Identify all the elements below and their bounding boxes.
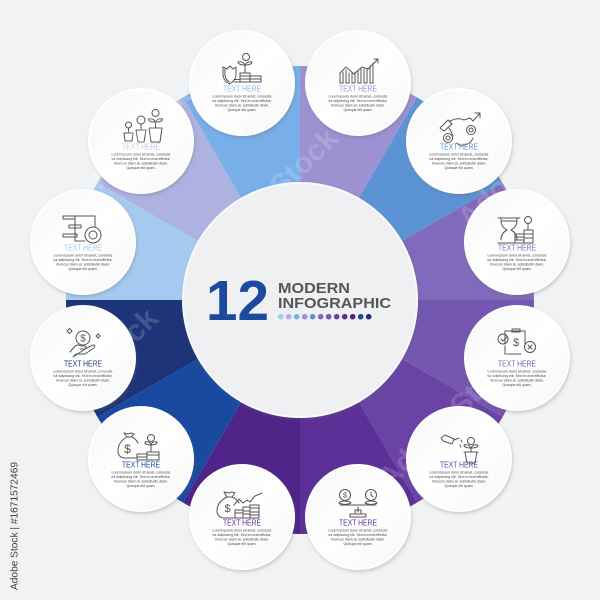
icon: scale with coin and clock	[339, 490, 377, 517]
label: TEXT HERE	[122, 460, 160, 470]
title number 12: 12	[206, 269, 269, 333]
description: tur adipiscing elit. Sed eu erat efficitur,	[328, 532, 388, 537]
panel: step 8 money bag growth	[190, 465, 294, 569]
description: tur adipiscing elit. Sed eu erat efficitur,	[488, 257, 546, 262]
description: Lorem ipsum dolor sit amet, consecte	[54, 252, 113, 258]
dollar sign: $	[124, 442, 131, 456]
label: TEXT HERE	[223, 84, 261, 94]
description: Quisque elit quam.	[228, 541, 256, 546]
description: tur adipiscing elit. Sed eu erat efficitur,	[488, 373, 546, 378]
label: TEXT HERE	[339, 84, 377, 94]
description: rhoncus diam at, sollicitudin diam.	[56, 262, 110, 266]
panel: step 4 hourglass	[465, 190, 569, 294]
panel: step 10 hand with coin	[31, 306, 135, 410]
description: Quisque elit quam.	[444, 483, 474, 488]
icon: watering can and money plant	[441, 435, 478, 463]
description: Lorem ipsum dolor sit amet, consecte	[212, 94, 272, 98]
label: TEXT HERE	[223, 518, 261, 528]
description: tur adipiscing elit. Sed eu erat efficitur,	[54, 257, 112, 262]
icon: hand holding coin with sparkles	[67, 328, 100, 357]
description: tur adipiscing elit. Sed eu erat efficitur,	[212, 98, 272, 103]
description: Quisque elit quam.	[344, 107, 372, 112]
description: Quisque elit quam.	[444, 165, 474, 170]
panel: step 1 shield and coins	[190, 31, 294, 135]
description: rhoncus diam at, sollicitudin diam.	[114, 478, 168, 484]
description: rhoncus diam at, sollicitudin diam.	[432, 160, 486, 166]
description: rhoncus diam at, sollicitudin diam.	[215, 102, 269, 108]
description: Lorem ipsum dolor sit amet, consecte	[112, 470, 171, 474]
description: Quisque elit quam.	[68, 382, 98, 387]
description: Lorem ipsum dolor sit amet, consecte	[328, 528, 388, 532]
icon: rising bar chart	[340, 59, 378, 83]
panel: step 12 growing plants	[89, 89, 193, 193]
icon: clipboard check and cross	[498, 329, 536, 354]
title: modern infographic: MODERN	[278, 280, 350, 297]
description: rhoncus diam at, sollicitudin diam.	[490, 262, 544, 266]
description: rhoncus diam at, sollicitudin diam.	[490, 378, 544, 382]
description: tur adipiscing elit. Sed eu erat efficitur,	[112, 474, 170, 479]
label: TEXT HERE	[498, 244, 536, 252]
color dots legend	[278, 314, 372, 320]
center circle	[183, 183, 417, 417]
description: tur adipiscing elit. Sed eu erat efficitur,	[430, 474, 488, 479]
description: Quisque elit quam.	[502, 382, 532, 387]
description: rhoncus diam at, sollicitudin diam.	[331, 536, 385, 542]
icon: three potted plants	[124, 110, 162, 142]
icon: hourglass and coins	[498, 216, 533, 243]
panel: step 3 coin exchange	[407, 89, 511, 193]
description: Lorem ipsum dolor sit amet, consecte	[488, 252, 547, 258]
dollar sign: $	[80, 334, 86, 344]
description: Lorem ipsum dolor sit amet, consecte	[112, 152, 171, 156]
title: modern infographic: INFOGRAPHIC	[278, 295, 391, 312]
label: TEXT HERE	[498, 360, 536, 368]
stock image id vertical text: Adobe Stock | #1671572469	[8, 462, 20, 590]
panel: step 6 watering plant	[407, 407, 511, 511]
description: Quisque elit quam.	[344, 541, 372, 546]
description: rhoncus diam at, sollicitudin diam.	[331, 102, 385, 108]
description: tur adipiscing elit. Sed eu erat efficitur,	[112, 156, 170, 161]
panel: step 7 balance scale	[306, 465, 410, 569]
watermarks: Adobe Stock	[82, 42, 235, 195]
icon: money bag, coins, rising arrow	[217, 492, 262, 518]
dollar sign: $	[343, 490, 348, 500]
icon: money bag and coin stacks	[118, 433, 159, 460]
description: rhoncus diam at, sollicitudin diam.	[56, 378, 110, 382]
panel: step 9 money bag and plant	[89, 407, 193, 511]
icon: shield, plant and coins	[223, 54, 261, 84]
dollar sign: $	[224, 503, 231, 515]
label: TEXT HERE	[440, 460, 478, 470]
description: Lorem ipsum dolor sit amet, consecte	[212, 528, 272, 532]
label: TEXT HERE	[64, 360, 102, 368]
description: tur adipiscing elit. Sed eu erat efficitur,	[328, 98, 388, 103]
watermarks: Adobe Stock	[12, 302, 165, 455]
description: Lorem ipsum dolor sit amet, consecte	[430, 152, 489, 156]
label: TEXT HERE	[339, 518, 377, 528]
label: TEXT HERE	[122, 142, 160, 152]
description: Quisque elit quam.	[126, 165, 156, 170]
description: Quisque elit quam.	[126, 483, 156, 488]
wheel of twelve coloured wedges	[66, 66, 534, 534]
icon: arrows with coins	[440, 113, 480, 145]
description: Lorem ipsum dolor sit amet, consecte	[430, 470, 489, 474]
panel: step 11 document and coin target	[31, 190, 135, 294]
description: rhoncus diam at, sollicitudin diam.	[432, 478, 486, 484]
dollar sign: $	[513, 337, 519, 349]
description: Lorem ipsum dolor sit amet, consecte	[488, 368, 547, 374]
description: tur adipiscing elit. Sed eu erat efficitur,	[430, 156, 488, 161]
watermarks: Adobe Stock	[192, 122, 345, 275]
description: Quisque elit quam.	[502, 266, 532, 271]
description: Quisque elit quam.	[68, 266, 98, 271]
label: TEXT HERE	[440, 142, 478, 152]
description: Quisque elit quam.	[228, 107, 256, 112]
description: Lorem ipsum dolor sit amet, consecte	[328, 94, 388, 98]
panel: step 5 clipboard	[465, 306, 569, 410]
description: Lorem ipsum dolor sit amet, consecte	[54, 368, 113, 374]
icon: tabbed list with coin	[63, 216, 101, 243]
label: TEXT HERE	[64, 244, 102, 252]
description: rhoncus diam at, sollicitudin diam.	[114, 160, 168, 166]
description: tur adipiscing elit. Sed eu erat efficitur,	[54, 373, 112, 378]
watermarks: Adobe Stock	[422, 442, 575, 595]
watermarks: Adobe Stock	[372, 342, 525, 495]
panel: step 2 growth chart	[306, 31, 410, 135]
description: tur adipiscing elit. Sed eu erat efficitur,	[212, 532, 272, 537]
description: rhoncus diam at, sollicitudin diam.	[215, 536, 269, 542]
